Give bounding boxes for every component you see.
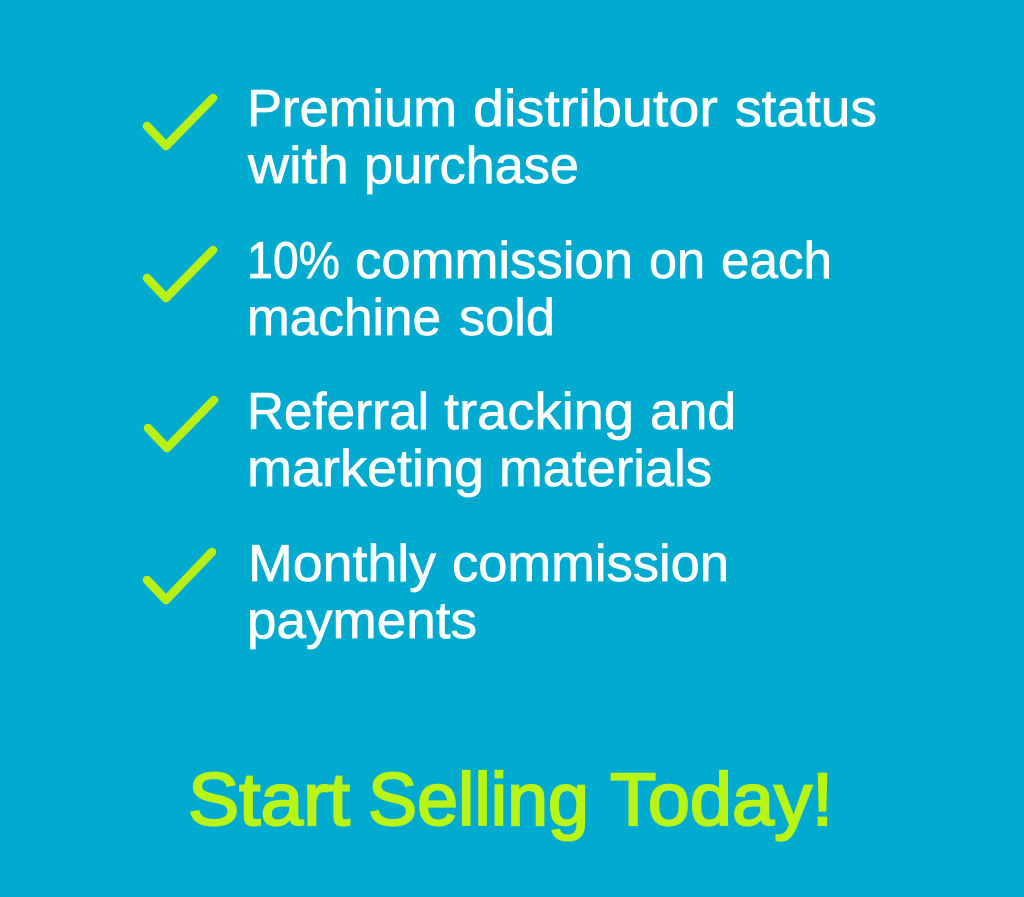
benefit 3: referral tracking (148, 383, 736, 498)
call to action: Start (188, 758, 350, 841)
text: benefit 4: payments (247, 592, 477, 650)
text: benefit 3: marketing (247, 440, 484, 498)
text: benefit 2: 10% (247, 232, 340, 290)
text: benefit 1: distributor (473, 80, 718, 138)
text: benefit 1: status (735, 80, 877, 138)
icon: check mark 2 (147, 250, 213, 298)
icon: check mark 3 (148, 400, 214, 448)
call to action: Selling (368, 758, 589, 841)
benefit 1: premium distributor status (147, 80, 877, 195)
text: benefit 2: commission (355, 232, 633, 290)
text: benefit 2: on (649, 232, 705, 290)
text: benefit 2: sold (459, 289, 555, 347)
text: benefit 4: commission (452, 535, 729, 593)
call to action: Today! (610, 758, 833, 841)
text: benefit 1: Premium (247, 80, 457, 138)
icon: check mark 4 (147, 552, 212, 600)
text: benefit 3: Referral (247, 383, 429, 441)
benefit 4: monthly payments (147, 535, 729, 650)
text: benefit 1: with (247, 137, 349, 195)
text: benefit 1: purchase (364, 137, 579, 195)
text: benefit 3: tracking (444, 383, 634, 441)
text: benefit 2: each (721, 232, 832, 290)
text: benefit 4: Monthly (248, 535, 436, 593)
icon: check mark 1 (147, 98, 213, 146)
text: benefit 3: and (650, 383, 736, 441)
text: benefit 3: materials (499, 440, 712, 498)
text: benefit 2: machine (247, 289, 441, 347)
benefit 2: commission (147, 232, 832, 347)
